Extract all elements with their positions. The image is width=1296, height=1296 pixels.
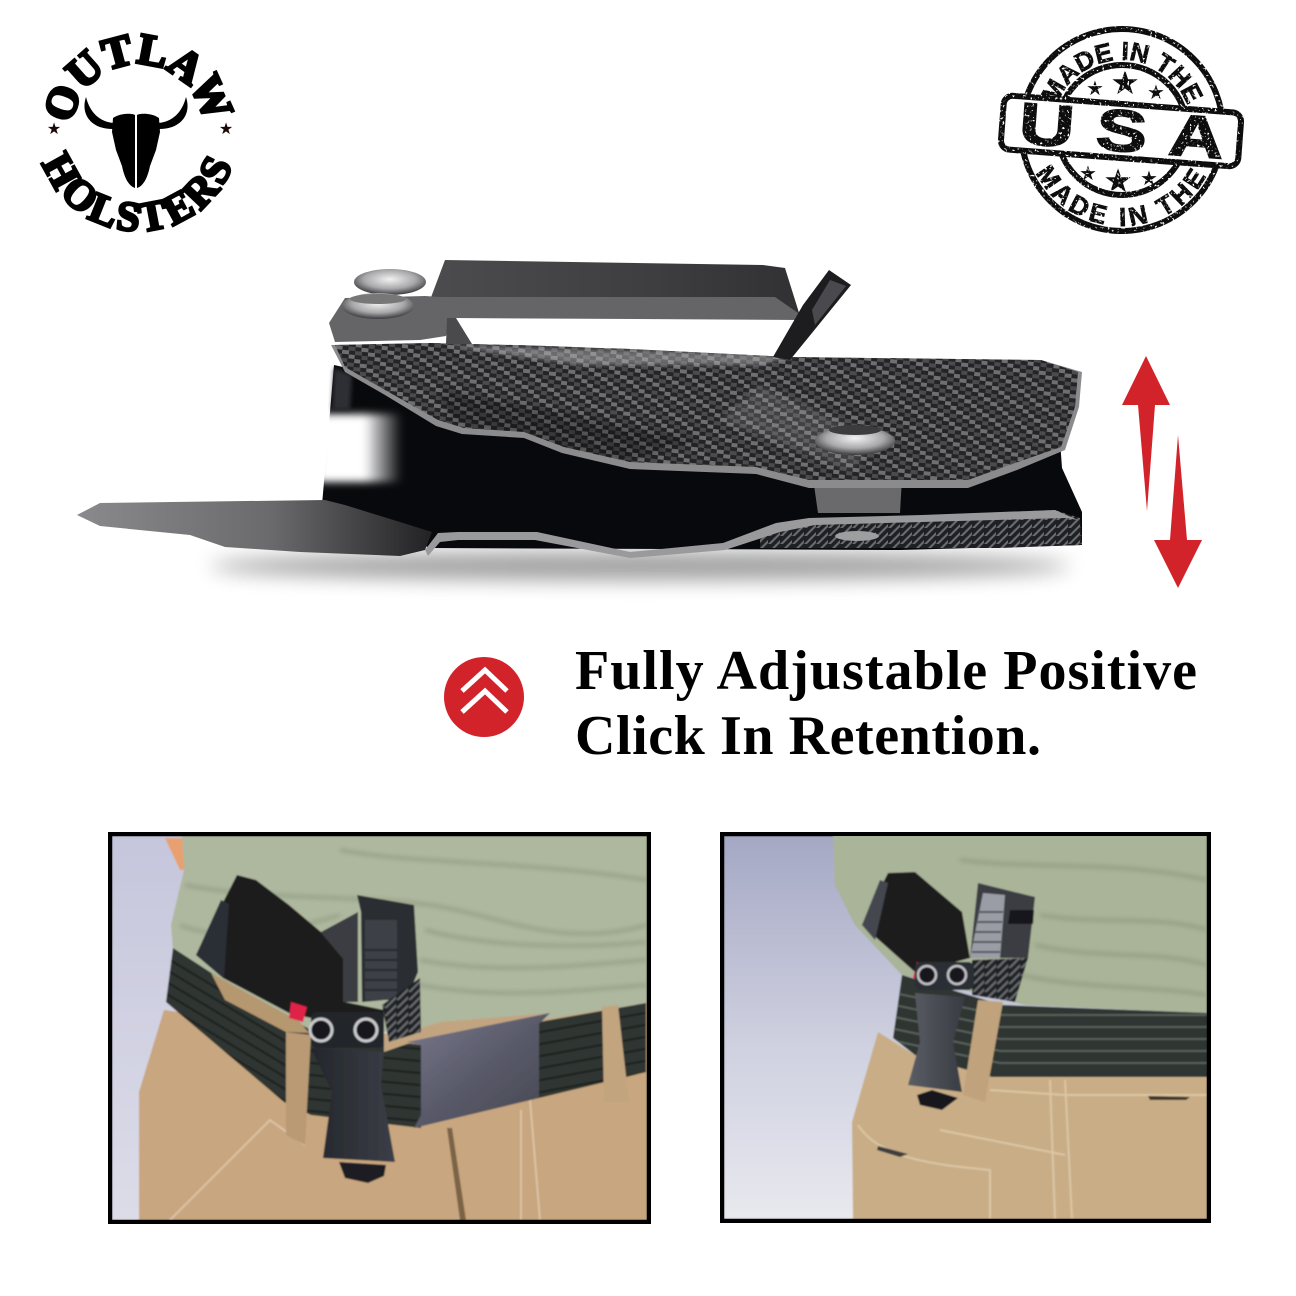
holster photo: side view (77, 260, 1082, 580)
logo stars: ★ (47, 119, 61, 138)
finger (165, 838, 187, 870)
belt stripes (880, 990, 1210, 1063)
clip body (311, 1048, 395, 1162)
heading: retention text (575, 640, 1197, 767)
shirt folds (960, 860, 1207, 995)
slide (357, 895, 418, 1002)
clip window (451, 318, 773, 352)
stamp band with USA: USA (1017, 91, 1227, 172)
clip tab (917, 1090, 958, 1110)
belt (893, 975, 1207, 1077)
clip head (915, 962, 974, 990)
clip screws (310, 1019, 377, 1041)
holster carbon (972, 958, 1028, 1002)
frame polymer (321, 912, 358, 1002)
frame (720, 832, 1211, 1223)
backdrop (724, 836, 1207, 1219)
red trigger tab (289, 1002, 307, 1022)
stamp arc text bottom: MADE IN THE (1036, 164, 1206, 226)
gun grip (862, 872, 970, 972)
belt loop left (286, 1032, 311, 1145)
logo stars (47, 119, 233, 138)
logo: Outlaw Holsters (40, 32, 236, 232)
floor shadow (210, 552, 1070, 580)
pocket slit (1148, 1096, 1190, 1100)
stamp stars: ★ (1140, 166, 1158, 190)
arrow: up (1122, 356, 1170, 511)
stamp arc text top: MADE IN THE (1040, 42, 1204, 105)
waistband gap centre (384, 1013, 550, 1052)
top carbon shell (331, 343, 1082, 488)
badge: Made in the USA stamp (998, 26, 1244, 234)
gun grip (196, 875, 384, 1020)
frame (108, 832, 651, 1224)
slide serrations (365, 920, 397, 1000)
belt clip (329, 260, 851, 360)
belt loop right (600, 1004, 628, 1083)
magazine base (862, 880, 888, 940)
icon: bull skull (84, 97, 188, 188)
lower shell edge (425, 510, 1078, 558)
trouser seams (170, 1100, 540, 1220)
bottom wing (77, 500, 432, 556)
photo panel: front view (108, 832, 651, 1224)
logo stars: ★ (219, 119, 233, 138)
belt left (166, 948, 421, 1128)
lower shell carbon (760, 510, 1082, 548)
rear sight (1008, 910, 1034, 924)
heading: retention text: Click In Retention. (575, 705, 1041, 767)
stamp stars (1079, 63, 1165, 200)
stamp stars: ★ (1086, 76, 1104, 100)
shirt (171, 836, 647, 1035)
stamp stars: ★ (1147, 80, 1165, 104)
trousers (139, 1003, 647, 1220)
slide (970, 883, 1035, 958)
clip front band (329, 296, 801, 342)
holster carbon (382, 978, 421, 1042)
shirt (833, 835, 1207, 1013)
logo ring text: HOLSTERS: HOLSTERS (40, 148, 232, 232)
clip top plate (430, 260, 800, 318)
back panel (322, 365, 1082, 550)
lower screw (835, 531, 879, 541)
retention post (813, 478, 902, 513)
belt stripes left (168, 960, 420, 1122)
trousers (852, 1032, 1207, 1219)
waistband gap left (211, 973, 309, 1033)
clip tab (339, 1162, 386, 1183)
stamp stars: ★ (1079, 161, 1097, 185)
fly shadow (447, 1128, 466, 1220)
slide light panel (970, 893, 1005, 958)
belt right (539, 1003, 646, 1098)
slide serrations (972, 912, 1003, 952)
serration lines (365, 950, 397, 990)
shell edge (331, 343, 1082, 488)
clip lever (773, 270, 851, 360)
clip head (311, 1012, 384, 1048)
icon: red chevron circle (444, 657, 524, 737)
shell screw (815, 425, 895, 455)
trouser seams (858, 1080, 1207, 1219)
stamp stars: ★ (1110, 63, 1140, 102)
magazine base (196, 900, 229, 978)
shell light sheen (440, 345, 880, 470)
logo ring text: OUTLAW: OUTLAW (46, 32, 236, 120)
red tab (913, 962, 925, 982)
shirt folds (180, 850, 647, 993)
clip support (446, 318, 472, 344)
belt loop (963, 1000, 1003, 1102)
clip body (908, 993, 965, 1092)
heading: retention text: Fully Adjustable Positive (575, 640, 1197, 702)
rear pocket mark (877, 1146, 908, 1157)
mount screws (342, 269, 426, 319)
clip screws (918, 966, 966, 984)
belt stripes right (540, 1012, 645, 1094)
photo panel: side view (720, 832, 1211, 1223)
back panel reflection (318, 414, 402, 482)
backdrop (112, 836, 389, 1220)
stamp rings (1021, 29, 1223, 231)
buckle (407, 1013, 550, 1128)
back panel soft highlight (332, 368, 352, 410)
shell carbon fill (335, 343, 1078, 480)
arrow: down (1154, 435, 1202, 588)
stamp stars: ★ (1103, 161, 1133, 200)
